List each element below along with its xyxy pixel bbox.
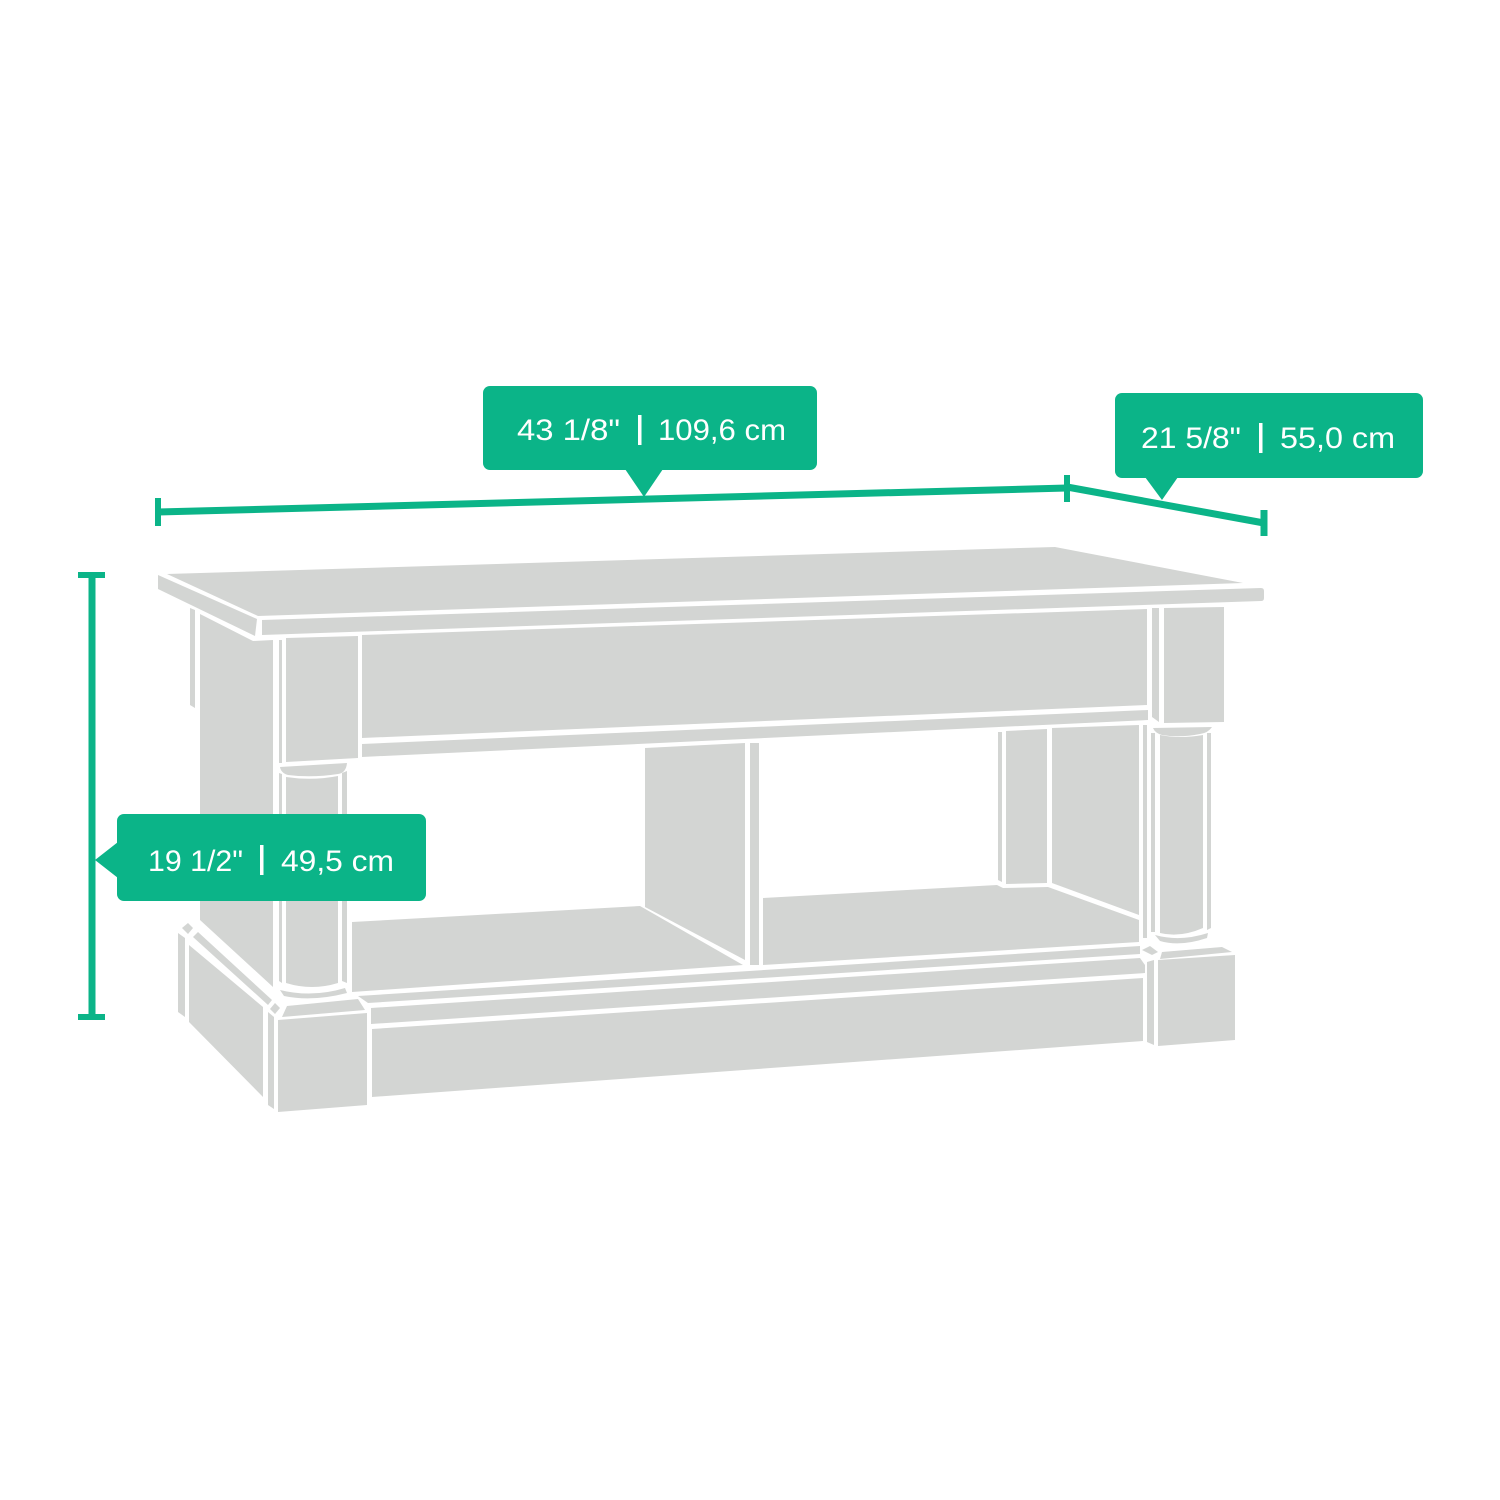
bottom moldings (358, 946, 1145, 1024)
right front foot (1142, 946, 1235, 1046)
callout: width: 109,6 cm (658, 414, 786, 447)
table top front edge (262, 588, 1264, 635)
shelf floor right (763, 885, 1139, 965)
coffee table illustration (158, 547, 1264, 1112)
central divider front (750, 743, 759, 965)
callout: depth: 21 5/8" (1141, 422, 1241, 455)
right front leg (1143, 607, 1224, 943)
callout: width: 43 1/8" (517, 414, 620, 447)
left front foot (268, 999, 367, 1112)
callout: width (483, 386, 817, 497)
back right post (998, 729, 1047, 884)
front apron (362, 609, 1147, 738)
front plinth (372, 978, 1143, 1097)
left side panel (200, 614, 273, 987)
callout: height: 49,5 cm (281, 845, 394, 878)
width dimension line (158, 475, 1067, 526)
height dimension line (78, 574, 105, 1017)
callout: depth: 55,0 cm (1280, 422, 1395, 455)
table top surface (167, 547, 1243, 616)
left rear strip (190, 608, 195, 708)
shelf floor left (352, 906, 743, 992)
apron lower molding (362, 710, 1148, 757)
table top left edge (158, 575, 257, 636)
callout: height: 19 1/2" (148, 845, 243, 878)
right side panel (1052, 725, 1139, 915)
left plinth (178, 923, 272, 1097)
callout: depth (1115, 393, 1423, 500)
callout: height (95, 814, 426, 901)
depth dimension line (1067, 487, 1264, 536)
left front leg (279, 636, 358, 998)
central divider side face (645, 743, 745, 960)
